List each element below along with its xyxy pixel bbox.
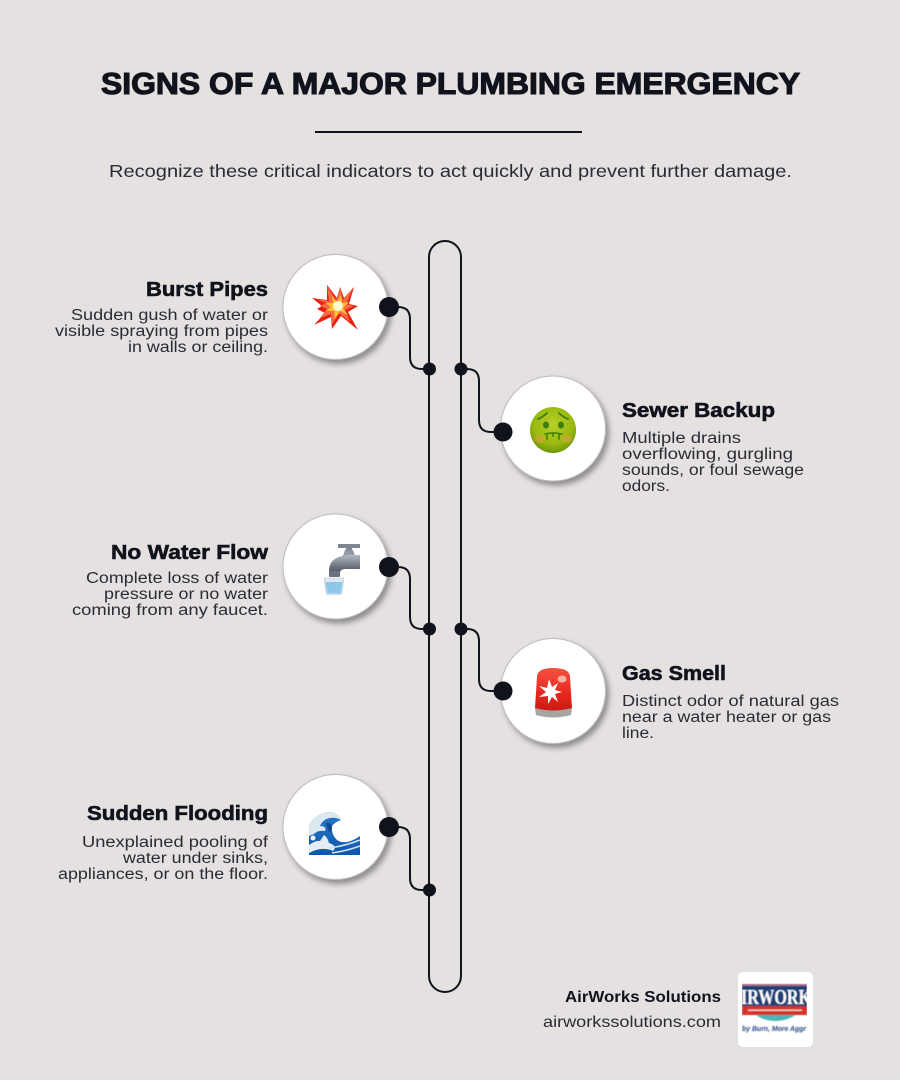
icon circle: Sudden Flooding <box>283 774 388 880</box>
description: Sudden Flooding: appliances, or on the floor. <box>58 866 268 883</box>
description: Gas Smell: Distinct odor of natural gas <box>622 693 839 710</box>
description: Sewer Backup: Multiple drains <box>622 430 741 447</box>
footer website: airworkssolutions.com <box>543 1014 721 1031</box>
connector: Sudden Flooding <box>389 827 429 890</box>
node: Burst Pipes large dot <box>379 297 399 317</box>
title: SIGNS OF A MAJOR PLUMBING EMERGENCY <box>101 67 800 101</box>
icon: faucet and glass <box>324 544 360 594</box>
description: Sudden Flooding <box>58 834 269 883</box>
description: No Water Flow: coming from any faucet. <box>72 602 268 619</box>
subtitle: Recognize these critical indicators to act quickly and prevent further damage. <box>109 161 792 181</box>
item: No Water Flow <box>72 514 436 636</box>
description: Gas Smell: near a water heater or gas <box>622 709 831 726</box>
connector: Burst Pipes <box>389 307 429 369</box>
icon circle: Gas Smell <box>500 638 606 744</box>
node: No Water Flow large dot <box>379 557 399 577</box>
description: Sewer Backup: odors. <box>622 478 670 495</box>
description: Burst Pipes <box>55 307 268 356</box>
connector: Sewer Backup <box>461 369 503 432</box>
node: Sudden Flooding rail dot <box>423 884 436 896</box>
description: Sewer Backup: sounds, or foul sewage <box>622 462 804 479</box>
node: Sewer Backup rail dot <box>454 362 468 376</box>
description: Sewer Backup <box>622 430 804 495</box>
icon: explosion <box>312 285 358 330</box>
logo: IRWORK <box>741 985 812 1009</box>
node: No Water Flow rail dot <box>423 622 436 636</box>
heading: No Water Flow: No Water Flow <box>111 541 268 564</box>
connector: Gas Smell <box>461 629 503 691</box>
description: Gas Smell: line. <box>622 725 654 742</box>
item: Gas Smell <box>454 622 839 744</box>
description: Burst Pipes: Sudden gush of water or <box>71 307 268 324</box>
description: No Water Flow: pressure or no water <box>104 586 268 603</box>
item: Sewer Backup <box>454 362 804 495</box>
icon circle: Sewer Backup <box>500 376 606 481</box>
connector: No Water Flow <box>389 567 429 629</box>
node: Sewer Backup large dot <box>494 422 512 442</box>
logo: by Burn, More Aggr <box>742 1026 807 1033</box>
description: Sudden Flooding: water under sinks, <box>122 850 268 867</box>
heading: Gas Smell: Gas Smell <box>622 662 726 685</box>
description: Burst Pipes: visible spraying from pipes <box>55 323 268 340</box>
logo <box>738 972 813 1047</box>
description: No Water Flow: Complete loss of water <box>86 570 268 587</box>
heading: Sewer Backup: Sewer Backup <box>622 399 775 422</box>
item: Sudden Flooding <box>58 774 436 896</box>
description: Sewer Backup: overflowing, gurgling <box>622 446 793 463</box>
heading: Sudden Flooding: Sudden Flooding <box>87 802 268 825</box>
icon: siren <box>535 668 572 718</box>
node: Gas Smell rail dot <box>454 622 468 636</box>
icon circle: Burst Pipes <box>283 254 388 360</box>
item: Burst Pipes <box>55 254 436 376</box>
icon: nauseated face <box>530 407 576 453</box>
node: Sudden Flooding large dot <box>379 817 399 837</box>
central timeline rail <box>429 241 461 992</box>
icon: wave <box>309 812 360 855</box>
footer brand name: AirWorks Solutions <box>565 989 721 1006</box>
description: Sudden Flooding: Unexplained pooling of <box>82 834 269 851</box>
node: Burst Pipes rail dot <box>423 362 436 376</box>
node: Gas Smell large dot <box>494 682 512 700</box>
icon circle: No Water Flow <box>283 514 388 619</box>
description: Burst Pipes: in walls or ceiling. <box>128 339 268 356</box>
description: No Water Flow <box>72 570 268 619</box>
heading: Burst Pipes: Burst Pipes <box>146 278 268 301</box>
description: Gas Smell <box>622 693 839 742</box>
